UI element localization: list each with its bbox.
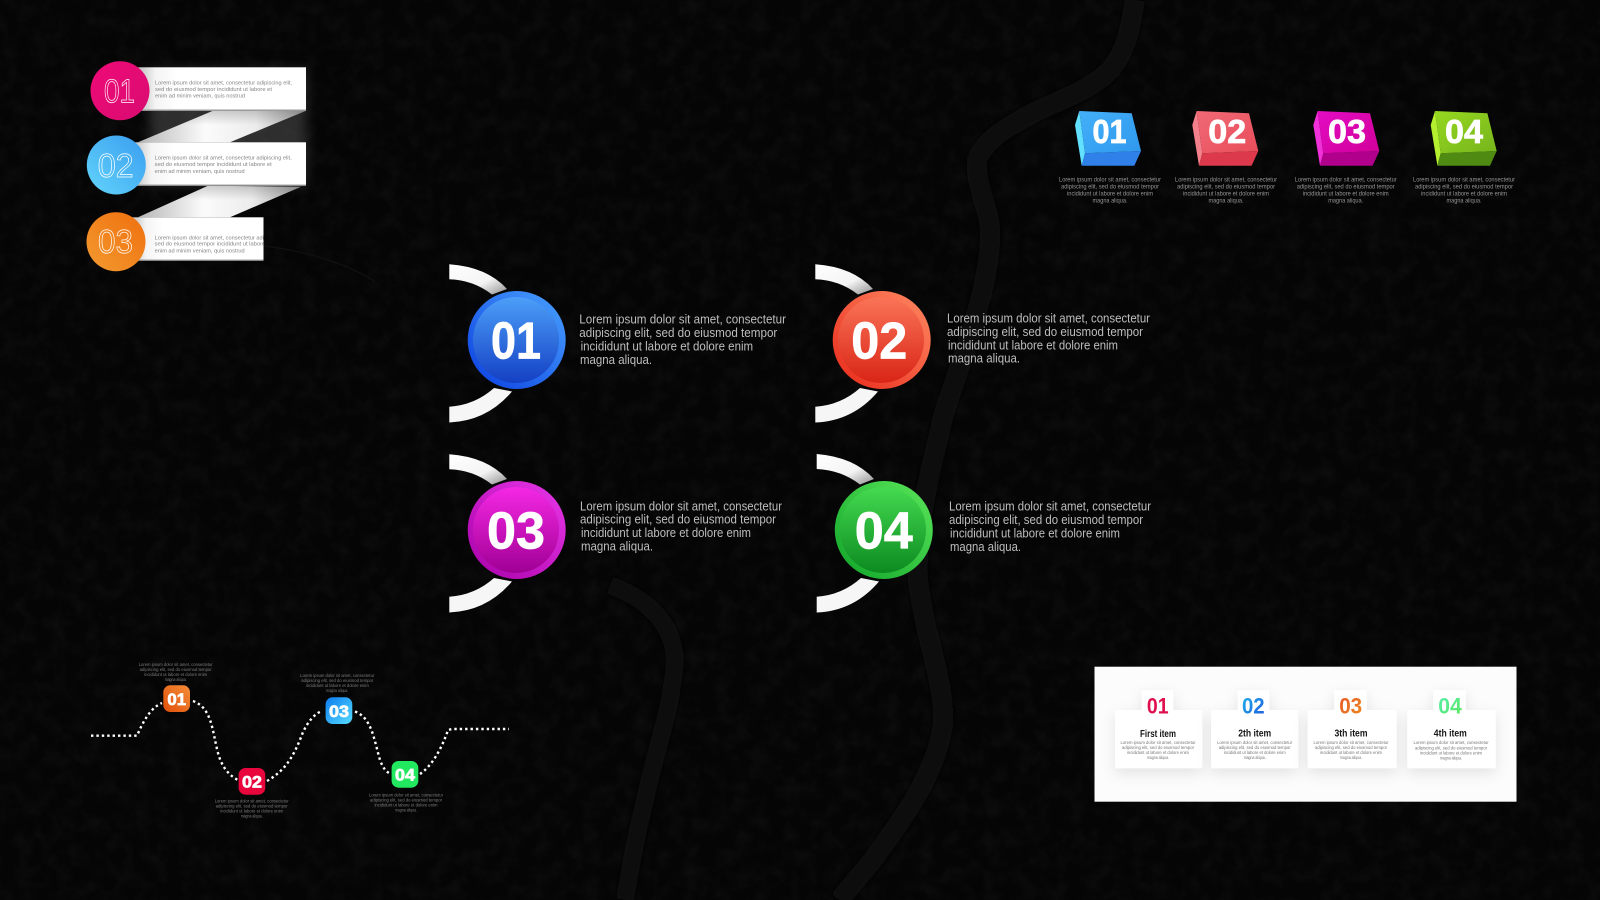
node 04	[369, 761, 444, 812]
cube 02: Lorem ipsum dolor sit amet, consectetur	[1175, 178, 1277, 184]
cube 04: 04	[1445, 113, 1484, 150]
panel: central item 04: magna aliqua.	[950, 540, 1021, 554]
ribbon 3: enim ad minim veniam, quis nostrud	[155, 248, 245, 254]
node 03: magna aliqua.	[326, 688, 348, 693]
card 04: adipiscing elit, sed do eiusmod tempor	[1415, 745, 1488, 750]
panel: central item 03: magna aliqua.	[581, 539, 653, 553]
card 02: incididunt ut labore et dolore enim	[1224, 750, 1286, 755]
panel: central item 02	[815, 264, 1150, 422]
ribbon 2	[130, 142, 306, 186]
card 01: magna aliqua.	[1147, 755, 1169, 760]
card 01	[1116, 692, 1201, 767]
card 04: Lorem ipsum dolor sit amet, consectetur	[1414, 740, 1489, 745]
cube 01: magna aliqua.	[1092, 198, 1128, 204]
ribbon 1: enim ad minim veniam, quis nostrud	[155, 94, 245, 100]
node 01: incididunt ut labore et dolore enim	[144, 672, 208, 677]
card 01: incididunt ut labore et dolore enim	[1127, 750, 1189, 755]
node 03: adipiscing elit, sed do eiusmod tempor	[301, 678, 374, 683]
panel: central item 03: Lorem ipsum dolor sit amet, consectetur	[580, 499, 782, 513]
card 02	[1212, 692, 1297, 767]
card 02: 2th item	[1238, 728, 1271, 739]
card 01: 01	[1147, 694, 1169, 718]
panel: central item 01: 01	[491, 313, 541, 371]
cube 02: adipiscing elit, sed do eiusmod tempor	[1177, 184, 1275, 190]
panel: central item 02: 02	[851, 313, 907, 371]
card 03: magna aliqua.	[1340, 755, 1362, 760]
card 01: adipiscing elit, sed do eiusmod tempor	[1122, 745, 1195, 750]
fold: between ribbon 1 and 2	[138, 111, 306, 142]
node 04: Lorem ipsum dolor sit amet, consectetur	[369, 792, 444, 798]
cube 01	[1059, 111, 1161, 204]
cube 04: incididunt ut labore et dolore enim	[1421, 192, 1507, 198]
card 03: 03	[1339, 694, 1362, 718]
dotted wave line	[91, 701, 509, 781]
cube 03	[1295, 111, 1397, 204]
panel: central item 03	[449, 454, 782, 612]
cube 03: adipiscing elit, sed do eiusmod tempor	[1297, 184, 1395, 190]
panel: dotted wave timeline	[91, 662, 509, 818]
node 02: incididunt ut labore et dolore enim	[220, 808, 284, 814]
card 02: Lorem ipsum dolor sit amet, consectetur	[1217, 740, 1293, 745]
cube 03: 03	[1328, 113, 1366, 150]
panel: central item 02: Lorem ipsum dolor sit amet, consectetur	[947, 312, 1150, 326]
node 01: magna aliqua.	[165, 677, 187, 682]
node 04: magna aliqua.	[395, 808, 417, 812]
cube 01: incididunt ut labore et dolore enim	[1067, 192, 1153, 198]
cube 04: magna aliqua.	[1446, 198, 1482, 204]
cube 01: Lorem ipsum dolor sit amet, consectetur	[1059, 178, 1161, 184]
cube 04: adipiscing elit, sed do eiusmod tempor	[1415, 184, 1513, 190]
panel: central item 04: 04	[855, 503, 913, 561]
panel: central item 04: incididunt ut labore et dolore enim	[950, 526, 1120, 540]
panel: central item 03: adipiscing elit, sed do eiusmod tempor	[580, 513, 776, 527]
panel: central item 02: incididunt ut labore et dolore enim	[948, 338, 1118, 352]
card 01: First item	[1140, 729, 1176, 740]
ribbon 3: sed do eiusmod tempor incididunt ut labore et	[155, 242, 272, 248]
node 02: Lorem ipsum dolor sit amet, consectetur	[215, 798, 289, 804]
panel: central item 03: incididunt ut labore et dolore enim	[581, 526, 751, 540]
node 03: Lorem ipsum dolor sit amet, consectetur	[300, 673, 375, 678]
panel: white card strip	[1094, 667, 1516, 802]
ribbon glow	[150, 70, 306, 185]
card 04: magna aliqua.	[1440, 756, 1462, 761]
node 02: 02	[242, 772, 262, 791]
cube 02: magna aliqua.	[1208, 198, 1244, 204]
node 01: 01	[167, 690, 186, 709]
panel: ribbon list top-left	[86, 61, 306, 271]
badge 01	[90, 61, 150, 120]
ribbon 2: enim ad minim veniam, quis nostrud	[155, 169, 245, 175]
card 03	[1309, 692, 1395, 767]
card 03: adipiscing elit, sed do eiusmod tempor	[1315, 745, 1388, 750]
node 04: adipiscing elit, sed do eiusmod tempor	[370, 798, 443, 802]
card 04	[1409, 692, 1494, 767]
panel: central item 01: magna aliqua.	[580, 353, 652, 367]
panel: central item 02: adipiscing elit, sed do eiusmod tempor	[947, 325, 1143, 339]
card 03: Lorem ipsum dolor sit amet, consectetur	[1314, 740, 1389, 745]
fold: between ribbon 2 and 3	[138, 186, 301, 217]
panel: 3D cubes top-right	[1059, 111, 1515, 204]
panel: central item 04: Lorem ipsum dolor sit amet, consectetur	[949, 499, 1151, 513]
cube 02	[1175, 111, 1277, 204]
card 01: Lorem ipsum dolor sit amet, consectetur	[1120, 740, 1196, 745]
node 01	[139, 662, 213, 712]
node 04: 04	[395, 765, 416, 784]
card 02: magna aliqua.	[1244, 755, 1266, 760]
cube 04: Lorem ipsum dolor sit amet, consectetur	[1413, 178, 1515, 184]
node 03: incididunt ut labore et dolore enim	[306, 683, 369, 688]
card 04: incididunt ut labore et dolore enim	[1420, 751, 1482, 756]
cube 02: incididunt ut labore et dolore enim	[1183, 192, 1269, 198]
cube 02: 02	[1208, 113, 1246, 150]
panel: central item 04	[817, 454, 1151, 612]
ribbon 1: Lorem ipsum dolor sit amet, consectetur adipiscing elit,	[155, 80, 293, 86]
panel: central item 01: Lorem ipsum dolor sit amet, consectetur	[579, 312, 786, 326]
badge 02: 02	[98, 147, 134, 184]
node 03	[300, 673, 375, 724]
ribbon 3	[132, 217, 264, 261]
ribbon 2: sed do eiusmod tempor incididunt ut labore et	[155, 162, 272, 168]
card 02: 02	[1242, 694, 1265, 718]
panel: central item 01: incididunt ut labore et dolore enim	[581, 340, 753, 354]
badge 03: 03	[98, 223, 133, 260]
panel: central item 04: adipiscing elit, sed do eiusmod tempor	[949, 513, 1143, 527]
ribbon 1	[135, 67, 306, 111]
node 04: incididunt ut labore et dolore enim	[374, 802, 438, 808]
card 04: 04	[1438, 694, 1462, 718]
panel: central item 02: magna aliqua.	[948, 352, 1020, 366]
node 02: adipiscing elit, sed do eiusmod tempor	[216, 804, 288, 808]
badge 02	[87, 136, 146, 194]
cube 03: Lorem ipsum dolor sit amet, consectetur	[1295, 178, 1397, 184]
panel: central item 01: adipiscing elit, sed do eiusmod tempor	[579, 326, 777, 340]
badge 03	[86, 212, 146, 271]
cube 03: incididunt ut labore et dolore enim	[1303, 192, 1389, 198]
cube 03: magna aliqua.	[1328, 198, 1364, 204]
node 02: magna aliqua.	[241, 814, 263, 818]
card 03: incididunt ut labore et dolore enim	[1320, 750, 1382, 755]
node 02	[215, 768, 289, 818]
node 03: 03	[329, 702, 349, 721]
cube 01: 01	[1092, 113, 1126, 150]
panel: central item 03: 03	[487, 503, 545, 561]
node 01: Lorem ipsum dolor sit amet, consectetur	[139, 662, 213, 667]
cube 04	[1413, 111, 1515, 204]
ribbon 3: Lorem ipsum dolor sit amet, consectetur adipiscing elit,	[155, 235, 292, 241]
card 03: 3th item	[1334, 728, 1368, 739]
card 04: 4th item	[1434, 729, 1467, 740]
cube 01: adipiscing elit, sed do eiusmod tempor	[1061, 184, 1159, 190]
node 01: adipiscing elit, sed do eiusmod tempor	[140, 667, 212, 672]
card 02: adipiscing elit, sed do eiusmod tempor	[1219, 745, 1291, 750]
ribbon 2: Lorem ipsum dolor sit amet, consectetur adipiscing elit,	[155, 156, 292, 162]
ribbon 1: sed do eiusmod tempor incididunt ut labore et	[155, 87, 273, 93]
badge 01: 01	[104, 73, 135, 110]
panel: central item 01	[449, 264, 786, 422]
